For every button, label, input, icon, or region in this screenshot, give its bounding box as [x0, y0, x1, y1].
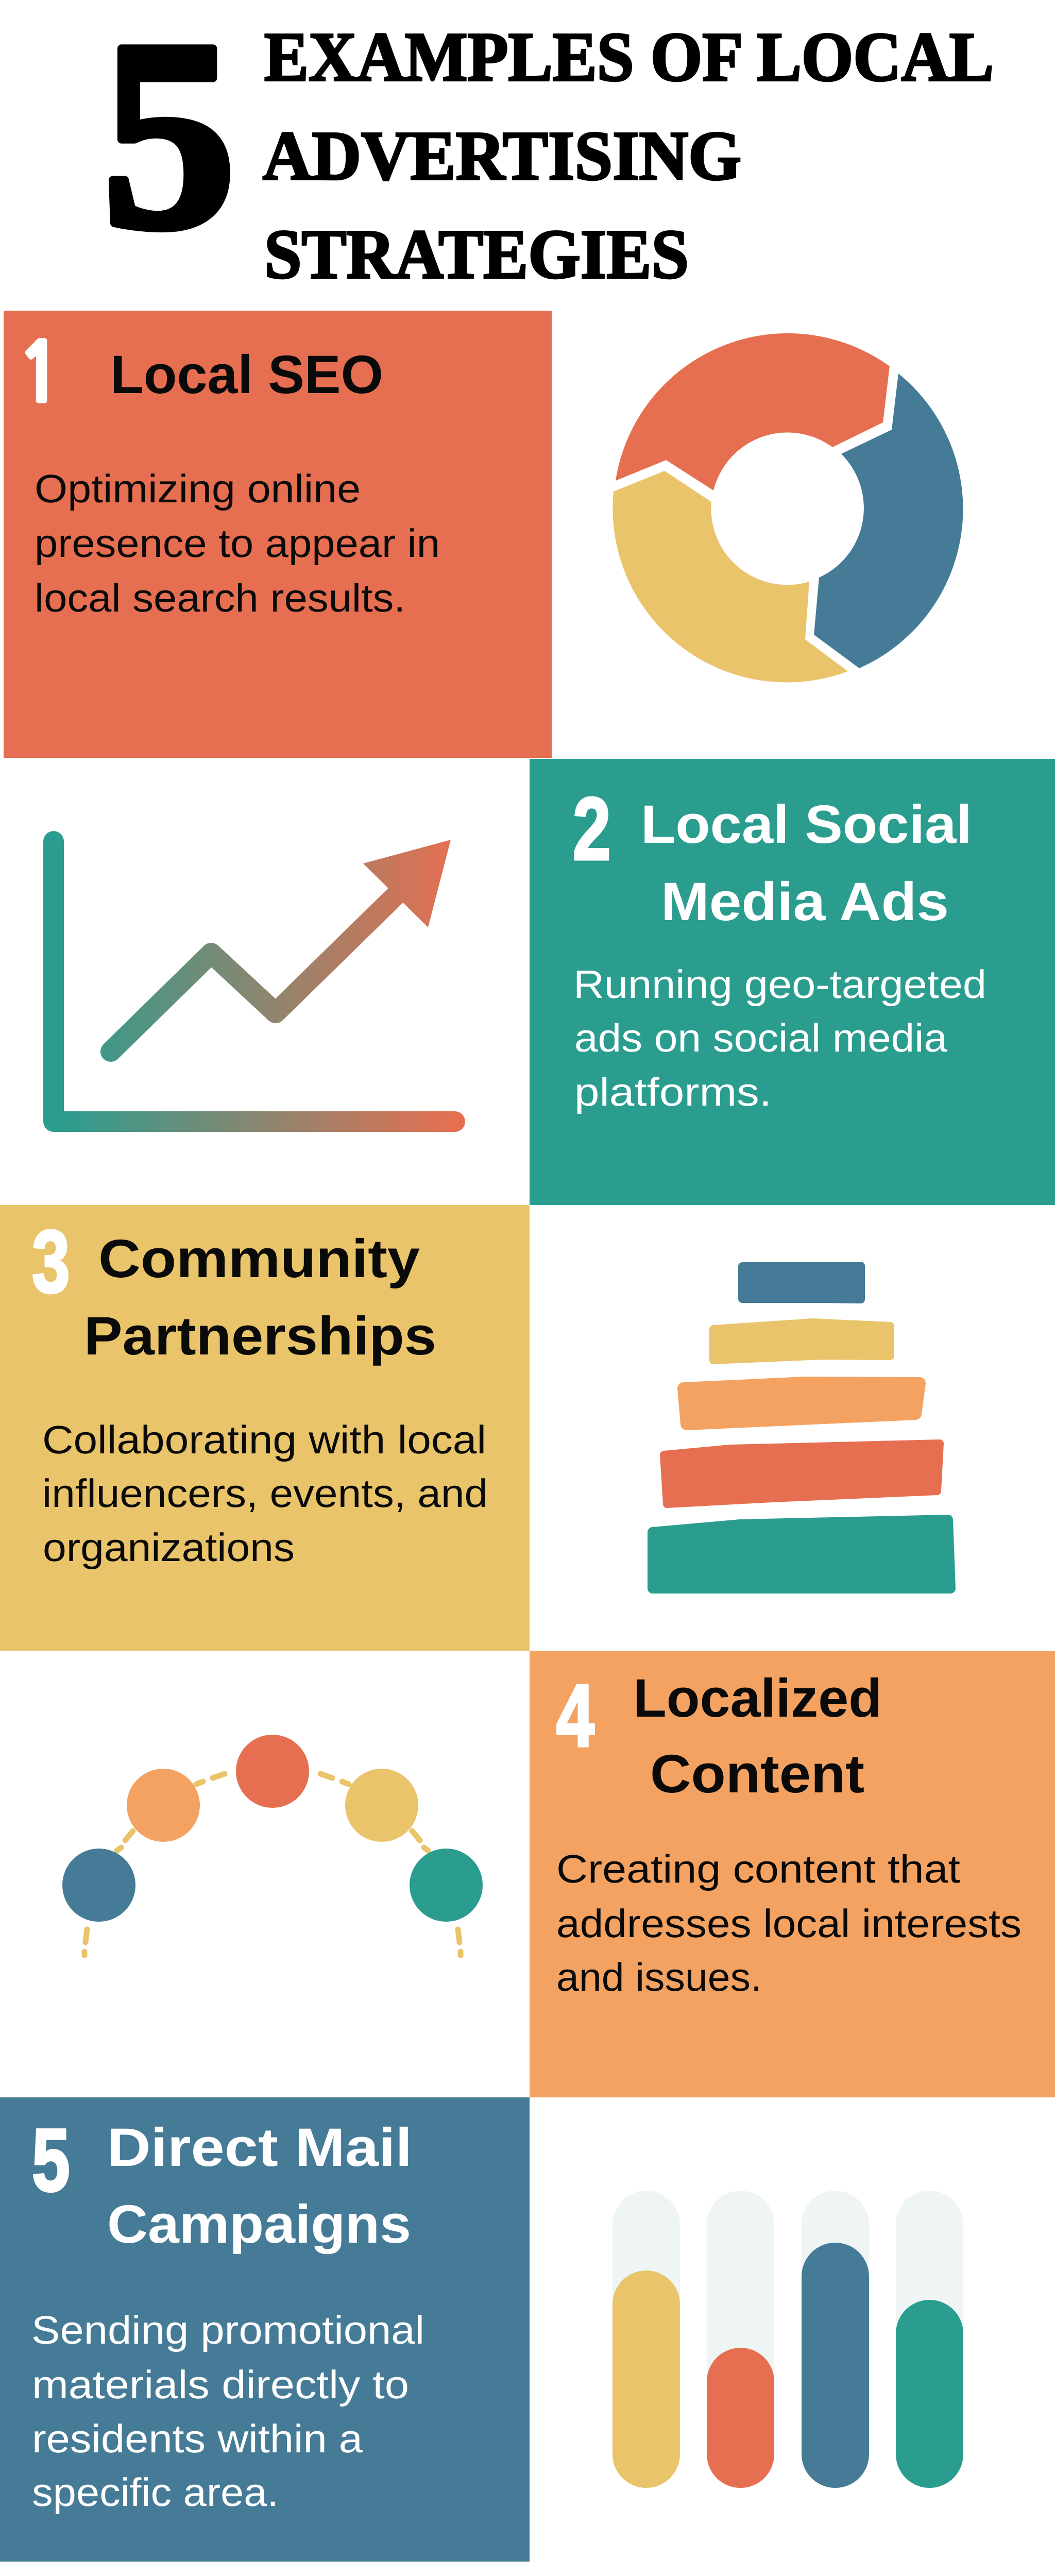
title line 3: STRATEGIES: [264, 216, 689, 293]
description: influencers, events, and: [42, 1471, 488, 1516]
heading: community partnerships: Community: [98, 1229, 420, 1289]
dot: yellow: [345, 1769, 418, 1842]
heading: community partnerships: [84, 1229, 436, 1366]
trend arrow: [111, 840, 451, 1052]
heading: direct mail campaigns: Campaigns: [107, 2194, 411, 2255]
description: ads on social media: [574, 1016, 947, 1060]
panel: direct mail campaigns: [0, 2097, 530, 2562]
description: Sending promotional: [31, 2308, 424, 2352]
heading: local seo: Local SEO: [110, 345, 383, 405]
bar tracks: [612, 2191, 963, 2488]
description: Creating content that: [556, 1847, 960, 1891]
description: specific area.: [32, 2470, 279, 2515]
donut chart: [612, 333, 963, 682]
description: addresses local interests: [556, 1902, 1022, 1946]
bar: red: [707, 2348, 774, 2488]
panel: local social media ads: [530, 759, 1055, 1205]
description: organizations: [43, 1526, 295, 1570]
dot: teal: [410, 1849, 483, 1922]
heading: local social media ads: Media Ads: [661, 872, 949, 932]
dot: orange: [127, 1769, 200, 1842]
layer: blue: [742, 1266, 861, 1299]
heading: localized content: [633, 1668, 882, 1804]
description: Optimizing online: [35, 467, 361, 511]
dot: blue: [62, 1849, 135, 1922]
panel: community partnerships: [0, 1205, 530, 1651]
description: presence to appear in: [35, 521, 440, 566]
heading: local social media ads: [641, 794, 972, 932]
description: [31, 2308, 424, 2515]
layer: teal: [653, 1520, 950, 1588]
chart axes: [54, 841, 455, 1122]
description: [42, 1418, 488, 1570]
number 2: 2: [573, 779, 611, 878]
panel: local seo: [4, 311, 552, 758]
description: [556, 1847, 1022, 1999]
heading: direct mail campaigns: [107, 2117, 412, 2255]
number 1: 1: [17, 333, 63, 414]
dashed arc: [84, 1774, 461, 1955]
heading: local social media ads: Local Social: [641, 794, 972, 855]
description: local search results.: [35, 576, 405, 620]
number 5: 5: [32, 2111, 70, 2210]
stacked pyramid: [653, 1266, 950, 1588]
bar: teal: [896, 2300, 963, 2488]
description: Collaborating with local: [42, 1418, 486, 1462]
bar: yellow: [612, 2270, 680, 2488]
arc of dots: [62, 1735, 483, 1955]
title line 1: EXAMPLES OF LOCAL: [264, 19, 994, 96]
heading: direct mail campaigns: Direct Mail: [107, 2117, 412, 2178]
description: and issues.: [556, 1955, 762, 1999]
heading: localized content: Localized: [633, 1668, 882, 1728]
bar chart: [612, 2191, 963, 2488]
description: Running geo-targeted: [573, 962, 986, 1007]
number 4: 4: [556, 1666, 594, 1765]
layer: orange: [684, 1383, 920, 1424]
panel: localized content: [530, 1651, 1055, 2097]
heading: localized content: Content: [650, 1744, 864, 1804]
line chart with arrow: [54, 840, 455, 1122]
number 3: 3: [32, 1212, 70, 1311]
layer: yellow: [713, 1323, 890, 1360]
description: residents within a: [32, 2417, 363, 2461]
bar: blue: [802, 2243, 869, 2488]
description: materials directly to: [32, 2363, 409, 2407]
description: [573, 962, 986, 1114]
layer: red: [664, 1444, 940, 1504]
description: [35, 467, 440, 620]
title: [102, 0, 994, 293]
title line 2: ADVERTISING: [263, 117, 741, 195]
description: platforms.: [574, 1070, 772, 1114]
heading: community partnerships: Partnerships: [84, 1306, 436, 1366]
dot: red: [236, 1735, 309, 1808]
